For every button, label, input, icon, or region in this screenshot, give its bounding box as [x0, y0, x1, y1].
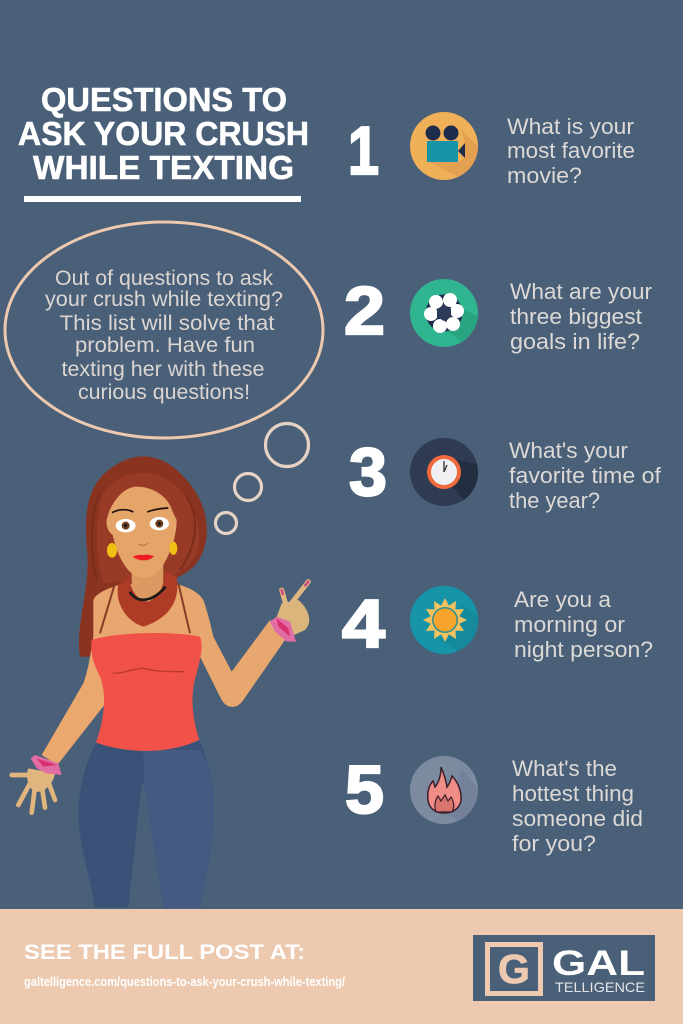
question text: What are your	[510, 279, 653, 304]
illustration: woman pointing	[12, 456, 309, 907]
question text: three biggest	[510, 304, 643, 329]
thought bubble with intro text: This list will solve that	[60, 312, 275, 335]
question 1	[348, 112, 635, 189]
footer url: galtelligence.com/questions-to-ask-your-crush-while-texting/	[24, 974, 345, 989]
jeans	[78, 740, 214, 907]
question text: most favorite	[507, 138, 635, 163]
icon: flame	[410, 756, 478, 824]
question text: goals in life?	[510, 329, 640, 354]
thought bubble with intro text: problem. Have fun	[75, 334, 255, 357]
title	[18, 81, 309, 202]
title: ASK YOUR CRUSH	[18, 115, 309, 152]
footer band	[0, 909, 683, 1024]
question text: movie?	[507, 163, 582, 188]
question text: hottest thing	[512, 781, 634, 806]
question text	[514, 587, 653, 662]
number 4: 4	[342, 586, 385, 662]
question 2	[344, 273, 653, 354]
question text	[507, 114, 635, 188]
thought bubble with intro text	[5, 222, 323, 438]
nose and lips	[139, 543, 148, 545]
top	[91, 633, 202, 751]
question 4	[342, 586, 653, 662]
question text: Are you a	[514, 587, 611, 612]
question text: someone did	[512, 806, 643, 831]
face	[107, 487, 177, 578]
logo	[473, 935, 655, 1001]
icon: soccer ball	[410, 279, 478, 347]
thought bubble with intro text: texting her with these	[62, 358, 264, 381]
question text: What's the	[512, 756, 617, 781]
icon: sun	[410, 586, 478, 654]
body skin	[93, 584, 285, 707]
number 2: 2	[344, 273, 385, 349]
question text: favorite time of	[509, 463, 662, 488]
necklace straps	[100, 583, 190, 633]
logo: TELLIGENCE	[555, 979, 645, 995]
thought bubble with intro text: your crush while texting?	[45, 288, 283, 311]
question 5	[345, 752, 643, 856]
footer call to action: SEE THE FULL POST AT:	[24, 941, 305, 964]
question text: What's your	[509, 438, 628, 463]
lower hand	[12, 768, 55, 813]
logo: G	[498, 946, 530, 992]
raised hand	[275, 582, 309, 638]
thought bubble with intro text: Out of questions to ask	[55, 267, 273, 290]
question text: the year?	[509, 488, 600, 513]
logo: GAL	[552, 944, 645, 983]
question text: morning or	[514, 612, 626, 637]
thought circles	[216, 424, 308, 534]
eyes and brows	[112, 508, 168, 513]
question text	[509, 438, 662, 513]
question text	[512, 756, 643, 856]
title: QUESTIONS TO	[41, 81, 287, 118]
question text: night person?	[514, 637, 653, 662]
hair	[79, 456, 207, 657]
title: WHILE TEXTING	[33, 149, 294, 186]
question text: for you?	[512, 831, 596, 856]
number 1: 1	[348, 113, 379, 189]
scarf	[118, 572, 177, 627]
icon: clock	[410, 438, 478, 506]
icon: movie camera	[410, 112, 478, 180]
number 3: 3	[349, 434, 387, 510]
scrunchies	[270, 617, 296, 642]
question text	[510, 279, 653, 354]
question 3	[349, 434, 662, 513]
earrings	[107, 543, 117, 558]
thought bubble with intro text: curious questions!	[78, 381, 250, 404]
number 5: 5	[345, 752, 384, 828]
question text: What is your	[507, 114, 635, 139]
